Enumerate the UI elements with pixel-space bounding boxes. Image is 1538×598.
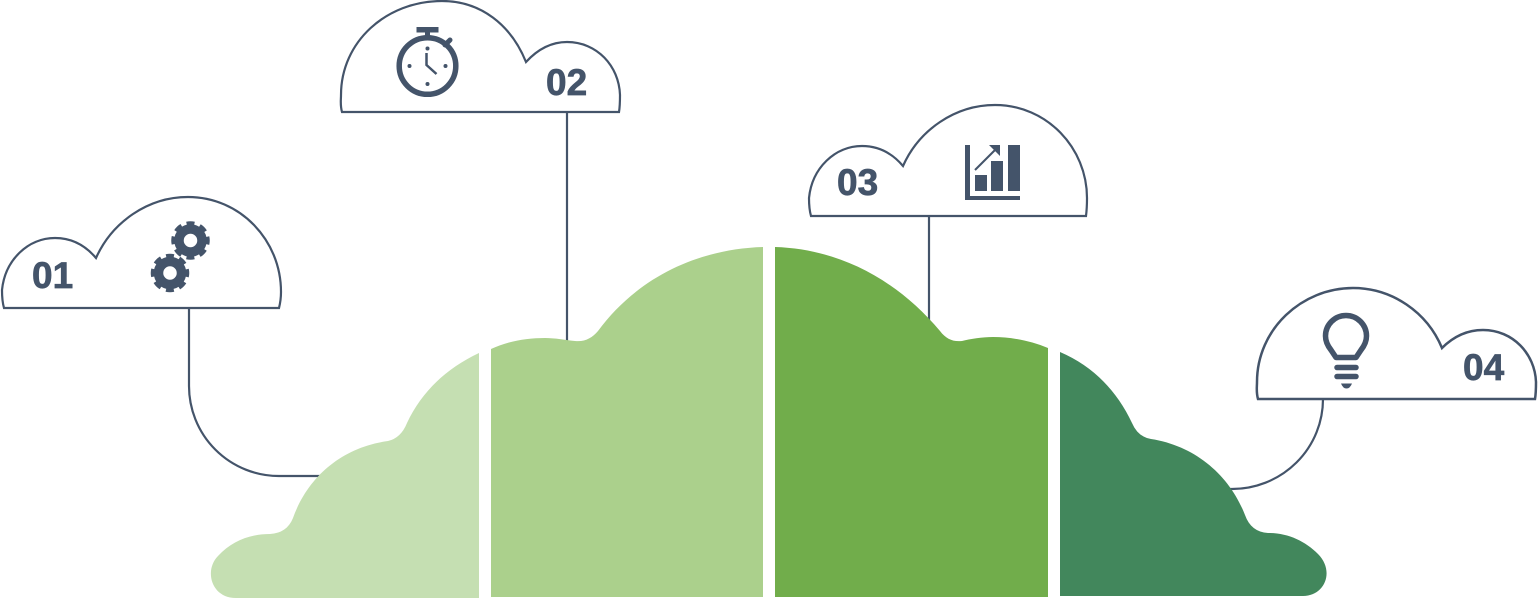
main cloud segment 2 xyxy=(491,247,763,597)
icon: light bulb xyxy=(1326,316,1366,388)
cloud outline 03 xyxy=(809,105,1087,216)
cloud outline 02 xyxy=(341,1,620,112)
icon: gears xyxy=(150,221,210,293)
cloud 01 xyxy=(2,197,281,308)
number 02: 02 xyxy=(546,62,587,103)
connector: 02 xyxy=(566,112,568,345)
main cloud segment 4 xyxy=(1060,352,1327,596)
main cloud segment 3 xyxy=(775,247,1048,597)
connector: 01 xyxy=(189,308,325,476)
icon: stopwatch xyxy=(399,27,456,94)
connector: 04 xyxy=(1225,399,1323,489)
cloud 02 xyxy=(341,1,620,112)
icon: bar chart xyxy=(965,145,1020,200)
cloud 03 xyxy=(809,105,1087,216)
cloud outline 01 xyxy=(2,197,281,308)
number 01: 01 xyxy=(32,255,73,296)
cloud 04 xyxy=(1257,288,1536,399)
number 04: 04 xyxy=(1463,347,1505,388)
cloud outline 04 xyxy=(1257,288,1536,399)
number 03: 03 xyxy=(837,162,878,203)
connector: 03 xyxy=(928,216,930,325)
main cloud segment 1 xyxy=(211,353,479,598)
